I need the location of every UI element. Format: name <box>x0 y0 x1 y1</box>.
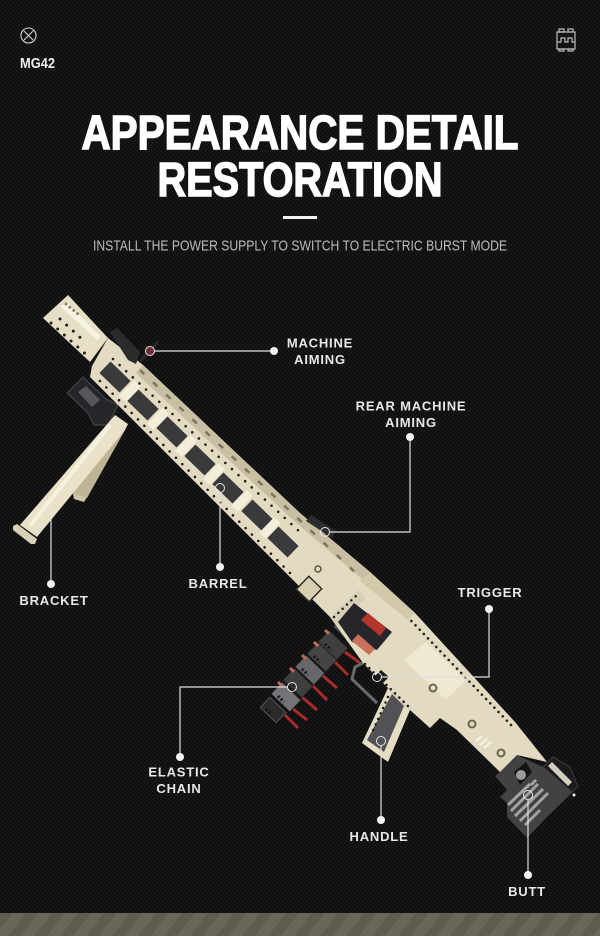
top rail <box>136 365 370 580</box>
bipod mount plate <box>67 377 118 425</box>
front sight block <box>110 328 158 364</box>
callout: elastic chain <box>148 682 296 796</box>
ammo belt red rounds <box>285 652 360 728</box>
callout: handle: HANDLE <box>350 829 408 844</box>
callout: bracket <box>19 519 89 608</box>
title <box>82 106 518 207</box>
toy machine gun <box>13 295 578 838</box>
callout: rear machine aiming: REAR MACHINE <box>356 398 466 414</box>
stud hole rows <box>100 359 512 726</box>
bottom striped band <box>0 913 600 936</box>
callout: butt: BUTT <box>508 884 546 899</box>
product name: MG42 <box>20 56 55 72</box>
callout: machine aiming: AIMING <box>294 352 346 367</box>
title: APPEARANCE DETAIL <box>82 106 518 160</box>
callout: machine aiming: MACHINE <box>287 336 353 350</box>
callout: machine aiming <box>146 336 353 367</box>
barrel windows <box>99 362 299 557</box>
gun body <box>43 295 547 772</box>
mid receiver plates <box>296 566 504 756</box>
muzzle shroud <box>43 295 108 362</box>
callout: trigger <box>372 585 522 682</box>
callout: butt <box>508 790 546 899</box>
callout: rear machine aiming: AIMING <box>385 415 437 430</box>
bipod bracket <box>13 415 128 544</box>
subtitle: INSTALL THE POWER SUPPLY TO SWITCH TO ELECTRIC BURST MODE <box>93 238 507 254</box>
feed cover and red rounds <box>330 590 392 684</box>
callout: barrel <box>189 484 247 591</box>
receiver and barrel jacket <box>90 338 547 772</box>
butt stock <box>495 755 578 838</box>
icon: circled X logo <box>21 28 36 43</box>
callout: elastic chain: CHAIN <box>156 781 202 796</box>
callout: elastic chain: ELASTIC <box>148 764 210 780</box>
elastic chain belt links <box>260 615 363 723</box>
trigger guard <box>352 662 377 703</box>
top cover <box>360 572 415 620</box>
callout: barrel: BARREL <box>189 576 247 591</box>
divider <box>283 216 317 219</box>
callout: trigger: TRIGGER <box>458 585 522 600</box>
icon: building brick <box>557 29 575 51</box>
callout: rear machine aiming <box>320 398 466 536</box>
handle <box>362 688 410 762</box>
callout: bracket: BRACKET <box>19 593 89 608</box>
callout: handle <box>350 736 408 844</box>
rear sight <box>306 515 336 538</box>
title: RESTORATION <box>158 153 442 207</box>
